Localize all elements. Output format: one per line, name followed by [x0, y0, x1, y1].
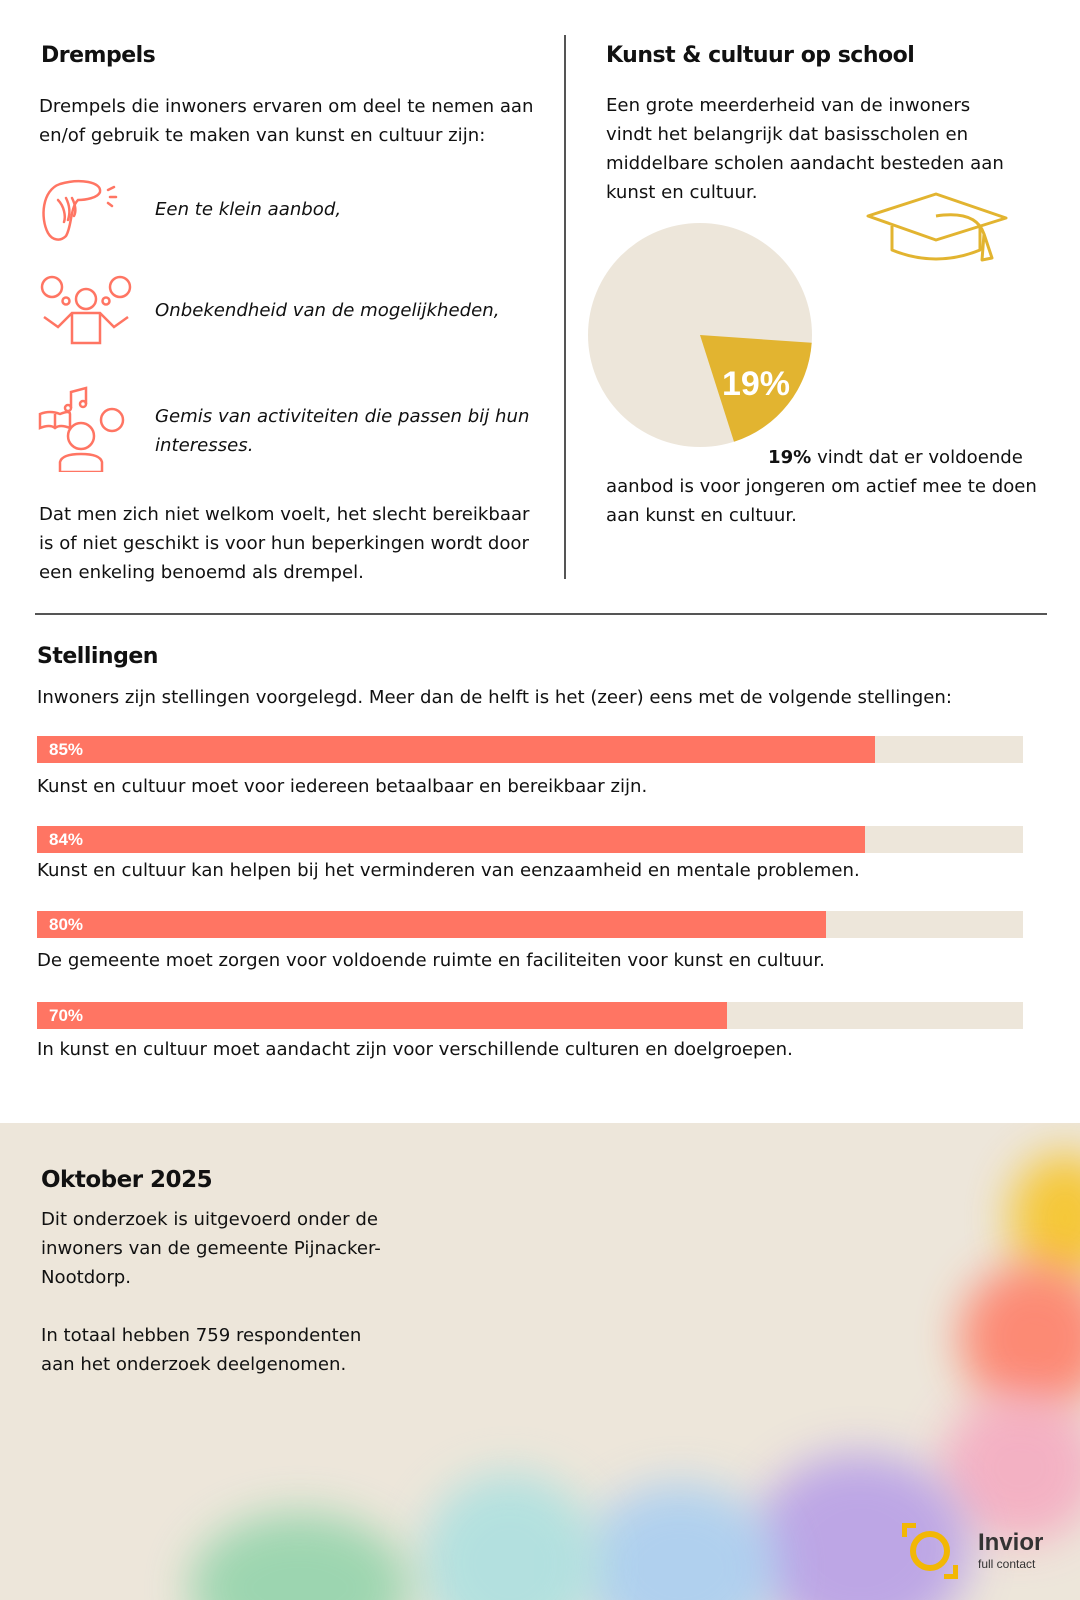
text: item 1: Een te klein aanbod, [155, 199, 341, 220]
bar 84%: 84% [49, 830, 83, 849]
heading: Drempels: Drempels [41, 43, 155, 68]
text: footer info: aan het onderzoek deelgenomen. [41, 1354, 346, 1375]
logo: Invior: Invior [978, 1529, 1043, 1556]
heading: Oktober 2025: Oktober 2025 [41, 1167, 212, 1193]
footer panel [0, 1123, 1080, 1600]
text: school intro: vindt het belangrijk dat basisscholen en [606, 124, 968, 145]
heading: Stellingen: Stellingen [37, 644, 158, 669]
text: drempels intro [39, 96, 533, 146]
text: school intro: Een grote meerderheid van de inwoners [606, 95, 970, 116]
label 2: Kunst en cultuur kan helpen bij het verminderen van eenzaamheid en mentale problemen. [37, 860, 860, 881]
text: drempels intro: Drempels die inwoners ervaren om deel te nemen aan [39, 96, 533, 117]
text: footer info: Nootdorp. [41, 1267, 131, 1288]
bar 70% [37, 1002, 1023, 1029]
label 4: In kunst en cultuur moet aandacht zijn voor verschillende culturen en doelgroepen. [37, 1039, 793, 1060]
text: school intro: middelbare scholen aandacht besteden aan [606, 153, 1004, 174]
text: school intro: kunst en cultuur. [606, 182, 757, 203]
text: pie caption: aanbod is voor jongeren om actief mee te doen [606, 476, 1037, 497]
pie chart [588, 223, 812, 447]
text: item 3: interesses. [155, 435, 253, 456]
text: school intro [606, 95, 1004, 203]
text: drempels intro: en/of gebruik te maken van kunst en cultuur zijn: [39, 125, 485, 146]
logo: Invior: full contact [978, 1557, 1035, 1571]
icon: graduation cap [866, 192, 1008, 262]
text: pie caption: 19% vindt dat er voldoende [768, 447, 1023, 468]
text: footer info [41, 1209, 381, 1375]
text: drempels outro: is of niet geschikt is voor hun beperkingen wordt door [39, 533, 529, 554]
logo: Invior [902, 1523, 1043, 1579]
text: pie caption [606, 447, 1037, 526]
text: stellingen intro: Inwoners zijn stellingen voorgelegd. Meer dan de helft is het (zeer) eens met de volgende stellingen: [37, 687, 952, 708]
label 3: De gemeente moet zorgen voor voldoende ruimte en faciliteiten voor kunst en cultuur. [37, 950, 825, 971]
text: item 2: Onbekendheid van de mogelijkheden, [155, 300, 499, 321]
text: drempels outro [39, 504, 530, 583]
bar 80% [37, 911, 1023, 938]
bar 84% [37, 826, 1023, 853]
text: item 3: Gemis van activiteiten die passen bij hun [155, 406, 529, 427]
text: item 3 [155, 406, 529, 456]
text: drempels outro: Dat men zich niet welkom voelt, het slecht bereikbaar [39, 504, 529, 525]
text: footer info: inwoners van de gemeente Pijnacker- [41, 1238, 381, 1259]
text: footer info: Dit onderzoek is uitgevoerd onder de [41, 1209, 378, 1230]
pie chart: 19% [722, 365, 790, 403]
bar 85%: 85% [49, 740, 83, 759]
icon: confused person [40, 276, 132, 344]
icon: person with interests [38, 386, 124, 472]
text: footer info: In totaal hebben 759 respondenten [41, 1325, 361, 1346]
icon: pinch hand [42, 180, 118, 241]
text: drempels outro: een enkeling benoemd als drempel. [39, 562, 364, 583]
divider horizontal [35, 613, 1047, 614]
heading: Kunst & cultuur op school: Kunst & cultuur op school [606, 43, 914, 68]
label 1: Kunst en cultuur moet voor iedereen betaalbaar en bereikbaar zijn. [37, 776, 647, 797]
bar 80%: 80% [49, 915, 83, 934]
bar 70%: 70% [49, 1006, 83, 1025]
text: pie caption: aan kunst en cultuur. [606, 505, 797, 526]
bar 85% [37, 736, 1023, 763]
divider vertical [564, 35, 566, 579]
